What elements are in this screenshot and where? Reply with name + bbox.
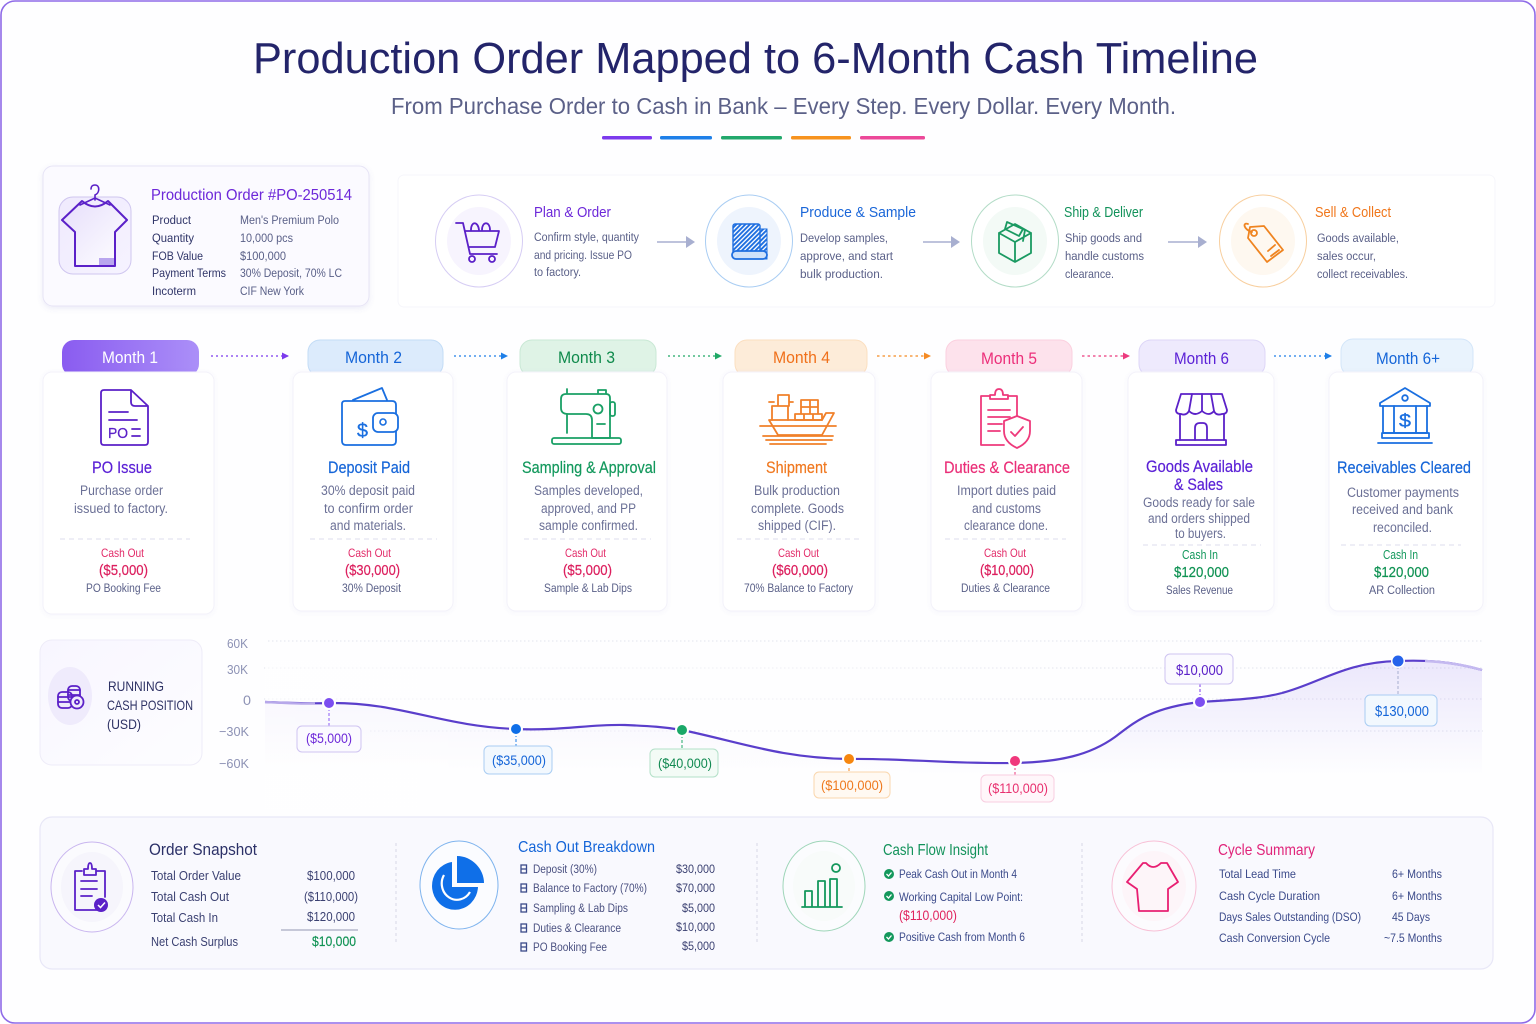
- order details: Quantity: [152, 231, 195, 245]
- icon: fabric roll: [706, 195, 792, 287]
- icon: cargo ship: [760, 395, 836, 444]
- card: goods available and sales: Goods Available: [1146, 457, 1253, 476]
- data point: month 4: ($100,000): [821, 777, 883, 793]
- arrow: month 2 to 3: [454, 355, 507, 357]
- card: deposit paid: and materials.: [330, 518, 406, 533]
- card: duties and clearance: ($10,000): [980, 562, 1034, 579]
- icon: storefront: [1176, 394, 1227, 445]
- card: deposit paid: to confirm order: [324, 501, 413, 516]
- order details: Men's Premium Polo: [240, 213, 339, 227]
- order details: 10,000 pcs: [240, 231, 293, 245]
- step: plan and order: and pricing. Issue PO: [534, 248, 632, 262]
- card: goods available and sales: Sales Revenue: [1166, 583, 1233, 597]
- card: PO issue: issued to factory.: [74, 501, 168, 516]
- chart label: RUNNING: [108, 678, 164, 694]
- arrow: [923, 241, 958, 243]
- month 3 pill: [520, 340, 656, 376]
- step: sell and collect: Goods available,: [1317, 231, 1399, 245]
- card: shipment: ($60,000): [772, 562, 828, 579]
- panel: process flow: [398, 175, 1495, 307]
- step: plan and order: to factory.: [534, 265, 581, 279]
- axis labels: −60K: [219, 756, 249, 771]
- month 6+ pill: Month 6+: [1376, 349, 1440, 368]
- card: goods available and sales: Cash In: [1182, 548, 1218, 562]
- step: sell and collect: collect receivables.: [1317, 267, 1408, 281]
- card: goods available and sales: and orders shipped: [1148, 511, 1250, 526]
- icon: clipboard and shield: [981, 389, 1030, 448]
- month 6 pill: Month 6: [1174, 349, 1229, 368]
- card: receivables cleared: Customer payments: [1347, 485, 1459, 500]
- data point: month 5: [981, 754, 1054, 802]
- arrow head: [951, 236, 960, 248]
- step: sell and collect: sales occur,: [1317, 249, 1376, 263]
- card: receivables cleared: received and bank: [1352, 502, 1453, 517]
- card: sampling and approval: Samples developed,: [534, 483, 643, 498]
- month 1 pill: [62, 340, 199, 376]
- step: sell and collect: [1315, 204, 1408, 281]
- axis labels: 30K: [227, 662, 248, 677]
- arrow head: [686, 236, 695, 248]
- card: sampling and approval: approved, and PP: [541, 501, 636, 516]
- icon: price tag: [1220, 195, 1306, 287]
- card: deposit paid: Cash Out: [348, 546, 392, 560]
- icon: bank: [1378, 388, 1432, 443]
- card: shipment: Cash Out: [778, 546, 820, 560]
- icon: wallet: [342, 388, 398, 445]
- card: duties and clearance: Import duties paid: [957, 483, 1056, 498]
- icon: t-shirt on hanger: [59, 185, 131, 274]
- chart label: [107, 678, 193, 732]
- cash out breakdown: $10,000: [676, 920, 715, 934]
- axis labels: 0: [243, 692, 251, 708]
- panel: bottom summary: [40, 817, 1493, 969]
- card: PO issue: [43, 372, 214, 614]
- order snapshot: ($110,000): [304, 889, 358, 904]
- card: receivables cleared: Cash In: [1383, 548, 1418, 562]
- month 4 pill: Month 4: [773, 348, 830, 367]
- cycle summary: 6+ Months: [1392, 867, 1442, 881]
- order details: CIF New York: [240, 284, 305, 298]
- card: shipment: shipped (CIF).: [758, 518, 836, 533]
- step: sell and collect: Sell & Collect: [1315, 204, 1392, 221]
- order snapshot: Order Snapshot: [149, 840, 257, 859]
- icon: box: [972, 195, 1058, 287]
- card: shipment: [723, 372, 875, 611]
- data point: month 6: $10,000: [1176, 663, 1223, 679]
- icon: coins: [48, 667, 92, 725]
- axis labels: 60K: [227, 636, 248, 651]
- cycle summary: ~7.5 Months: [1384, 931, 1442, 945]
- card: sampling and approval: ($5,000): [563, 562, 612, 579]
- chart: running cash line: [265, 660, 1482, 810]
- card: sampling and approval: [507, 372, 667, 611]
- card: duties and clearance: [931, 372, 1082, 611]
- cash out breakdown: $30,000: [676, 862, 715, 876]
- icon: pink t-shirt: [1112, 841, 1196, 931]
- card: receivables cleared: AR Collection: [1369, 583, 1435, 597]
- cash out breakdown: $70,000: [676, 881, 715, 895]
- step: ship and deliver: [1064, 204, 1144, 281]
- arrow head: [1198, 236, 1207, 248]
- cycle summary: Cycle Summary: [1218, 842, 1315, 859]
- card: goods available and sales: [1128, 372, 1274, 611]
- panel: production order: [43, 166, 369, 306]
- card: receivables cleared: Receivables Cleared: [1337, 458, 1471, 477]
- card: PO issue: Purchase order: [80, 483, 163, 498]
- data point: month 1: [297, 696, 361, 752]
- cash out breakdown: PO Booking Fee: [533, 940, 607, 954]
- order details: FOB Value: [152, 249, 203, 263]
- chart label: (USD): [107, 716, 141, 732]
- order snapshot: $120,000: [307, 909, 355, 924]
- icon: bar chart: [783, 841, 865, 931]
- month 2 pill: Month 2: [345, 348, 402, 367]
- cycle summary: 6+ Months: [1392, 889, 1442, 903]
- step: produce and sample: Develop samples,: [800, 231, 888, 245]
- panel: running cash position label: [40, 640, 202, 765]
- card: shipment: Bulk production: [754, 483, 840, 498]
- cash out breakdown: Cash Out Breakdown: [518, 839, 655, 856]
- order snapshot: $10,000: [312, 934, 356, 949]
- cash out breakdown: $5,000: [682, 901, 715, 915]
- card: deposit paid: ($30,000): [345, 562, 400, 579]
- card: deposit paid: 30% Deposit: [342, 581, 402, 595]
- cash flow insight: Cash Flow Insight: [883, 842, 988, 859]
- data point: month 3: [650, 723, 718, 777]
- colour bars: [602, 136, 925, 140]
- data point: month 6+: $130,000: [1375, 704, 1429, 720]
- card: goods available and sales: Goods ready for sale: [1143, 495, 1255, 510]
- data point: month 5: ($110,000): [988, 780, 1048, 796]
- arrow: month 4 to 5: [877, 355, 930, 357]
- icon: bank: $: [1399, 411, 1411, 431]
- month 4 pill: [735, 340, 867, 376]
- card: receivables cleared: $120,000: [1374, 564, 1429, 581]
- cash out breakdown: $5,000: [682, 939, 715, 953]
- data point: month 6+: [1365, 654, 1437, 726]
- cycle summary: [1218, 842, 1442, 945]
- cash out breakdown: Duties & Clearance: [533, 921, 621, 935]
- card: shipment: complete. Goods: [751, 501, 844, 516]
- card: duties and clearance: Cash Out: [984, 546, 1027, 560]
- cash flow insight: Positive Cash from Month 6: [899, 930, 1025, 944]
- order details: Product: [152, 213, 192, 227]
- order snapshot: Total Cash Out: [151, 889, 229, 904]
- cash flow insight: Working Capital Low Point:: [899, 890, 1023, 904]
- cycle summary: Cash Cycle Duration: [1219, 889, 1320, 903]
- data point: month 2: ($35,000): [492, 752, 546, 768]
- step: ship and deliver: Ship & Deliver: [1064, 204, 1143, 221]
- cycle summary: 45 Days: [1392, 910, 1430, 924]
- card: goods available and sales: & Sales: [1174, 475, 1223, 494]
- card: deposit paid: 30% deposit paid: [321, 483, 415, 498]
- card: receivables cleared: [1329, 372, 1483, 611]
- step: ship and deliver: Ship goods and: [1065, 231, 1142, 245]
- chart label: CASH POSITION: [107, 697, 193, 713]
- card: shipment: 70% Balance to Factory: [744, 581, 854, 595]
- step: ship and deliver: handle customs: [1065, 249, 1144, 263]
- arrow: month 3 to 4: [668, 355, 721, 357]
- card: PO issue: ($5,000): [99, 562, 148, 579]
- icon: PO document: [101, 390, 148, 445]
- step: plan and order: [534, 204, 640, 279]
- icon: PO document: PO: [108, 425, 128, 442]
- cash out breakdown: Deposit (30%): [533, 862, 597, 876]
- subtitle: From Purchase Order to Cash in Bank – Every Step. Every Dollar. Every Month.: [391, 93, 1176, 119]
- cycle summary: Cash Conversion Cycle: [1219, 931, 1330, 945]
- icon: cart: [436, 195, 522, 287]
- data point: month 6: [1165, 654, 1233, 709]
- data point: month 4: [814, 752, 890, 798]
- step: produce and sample: approve, and start: [800, 249, 894, 263]
- cash out breakdown: [518, 839, 715, 954]
- card: sampling and approval: Cash Out: [565, 546, 607, 560]
- month 1 pill: Month 1: [102, 348, 158, 367]
- step: produce and sample: [800, 204, 916, 281]
- order snapshot: $100,000: [307, 868, 355, 883]
- month 5 pill: Month 5: [981, 349, 1037, 368]
- axis labels: [219, 636, 251, 771]
- card: duties and clearance: clearance done.: [964, 518, 1048, 533]
- card: receivables cleared: reconciled.: [1373, 520, 1432, 535]
- arrow: month 5 to 6: [1082, 355, 1129, 357]
- icon: sewing machine: [552, 389, 621, 444]
- step: ship and deliver: clearance.: [1065, 267, 1114, 281]
- card: duties and clearance: Duties & Clearance: [944, 458, 1070, 477]
- order heading: Production Order #PO-250514: [151, 187, 352, 204]
- cash flow insight: [883, 842, 1025, 944]
- card: sampling and approval: sample confirmed.: [539, 518, 638, 533]
- order snapshot: [149, 840, 358, 949]
- order details: Payment Terms: [152, 266, 226, 280]
- step: produce and sample: Produce & Sample: [800, 204, 916, 221]
- month 3 pill: Month 3: [558, 348, 615, 367]
- card: duties and clearance: Duties & Clearance: [961, 581, 1050, 595]
- title: Production Order Mapped to 6-Month Cash Timeline: [253, 34, 1258, 83]
- order details: $100,000: [240, 249, 286, 263]
- data point: month 3: ($40,000): [658, 755, 712, 771]
- card: sampling and approval: Sampling & Approval: [522, 458, 656, 477]
- card: PO issue: PO Issue: [92, 458, 152, 477]
- step: produce and sample: bulk production.: [800, 267, 883, 281]
- order snapshot: Net Cash Surplus: [151, 934, 238, 949]
- card: goods available and sales: $120,000: [1174, 564, 1229, 581]
- data point: month 1: ($5,000): [306, 730, 352, 746]
- order snapshot: Total Cash In: [151, 910, 218, 925]
- data point: month 2: [484, 722, 552, 774]
- icon: pie chart: [420, 841, 498, 929]
- month 6+ pill: [1341, 339, 1473, 376]
- order details: [152, 213, 342, 298]
- card: shipment: Shipment: [766, 458, 827, 477]
- arrow: [1168, 241, 1205, 243]
- icon: wallet: $: [357, 421, 368, 442]
- arrow: month 1 to 2: [211, 355, 288, 357]
- order details: 30% Deposit, 70% LC: [240, 266, 342, 280]
- card: deposit paid: Deposit Paid: [328, 458, 410, 477]
- step: plan and order: Plan & Order: [534, 204, 611, 221]
- cycle summary: Days Sales Outstanding (DSO): [1219, 910, 1361, 924]
- month 5 pill: [946, 340, 1072, 376]
- cash flow insight: ($110,000): [899, 907, 957, 923]
- icon: clipboard check: [51, 842, 133, 932]
- order snapshot: Total Order Value: [151, 868, 241, 883]
- arrow: month 6 to 6+: [1274, 355, 1331, 357]
- arrow: [657, 241, 693, 243]
- cash flow insight: Peak Cash Out in Month 4: [899, 867, 1017, 881]
- card: sampling and approval: Sample & Lab Dips: [544, 581, 632, 595]
- card: deposit paid: [293, 372, 453, 611]
- month 6 pill: [1139, 340, 1265, 376]
- order details: Incoterm: [152, 284, 196, 298]
- cycle summary: Total Lead Time: [1219, 867, 1296, 881]
- month 2 pill: [308, 340, 443, 376]
- card: goods available and sales: to buyers.: [1175, 526, 1226, 541]
- card: duties and clearance: and customs: [972, 501, 1041, 516]
- cash out breakdown: Sampling & Lab Dips: [533, 901, 628, 915]
- card: PO issue: Cash Out: [101, 546, 145, 560]
- step: plan and order: Confirm style, quantity: [534, 230, 640, 244]
- axis labels: −30K: [219, 724, 249, 739]
- cash out breakdown: Balance to Factory (70%): [533, 881, 647, 895]
- card: PO issue: PO Booking Fee: [86, 581, 161, 595]
